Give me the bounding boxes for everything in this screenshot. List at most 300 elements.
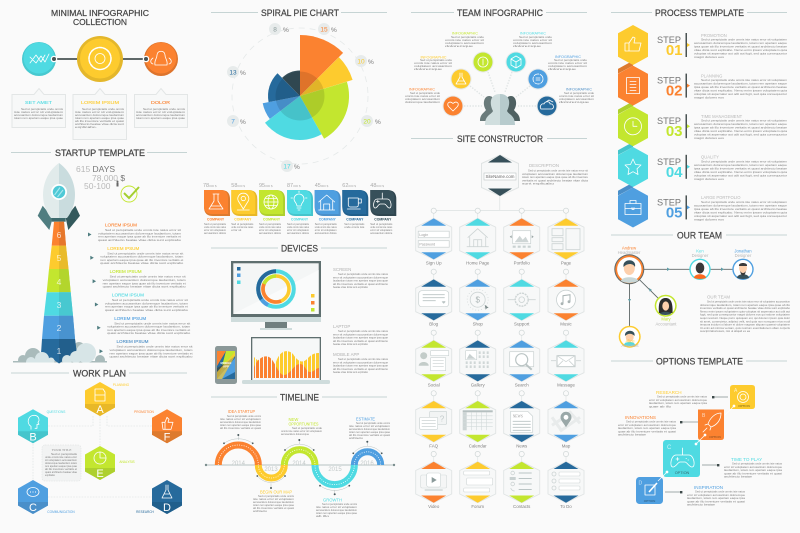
heading: work plan: WORK PLAN (73, 368, 126, 378)
text: laptop: LAPTOP (333, 324, 350, 329)
callout: set amet: accusantium doloremque laudantium (14, 113, 63, 117)
tile: page: Page (561, 261, 572, 266)
tile: page (548, 208, 584, 266)
tile: portfolio (504, 208, 540, 266)
infographic yellow: voluptatem accusantium (414, 64, 452, 68)
label: new opportunities: OPPORTUNITIES (288, 422, 319, 426)
tile: contacts (504, 451, 540, 509)
callout: lorem ipsum: ab illo inventore veritatis et quasi (75, 119, 124, 123)
hex B questions: B (29, 431, 37, 443)
tree connector (434, 196, 566, 210)
callout: lorem ipsum: iste natus error sit voluptatem (75, 110, 124, 114)
our team text: Nemo enim ipsam voluptatem quia voluptas sit aspernatur aut odit aut (700, 309, 790, 313)
tile: faq (416, 391, 452, 448)
infographic lime: Sed ut perspiciatis unde (451, 35, 484, 39)
team names: Assistant (622, 343, 639, 348)
hex C communication: C (29, 502, 37, 514)
step 02: accusantium doloremque laudantium, totam rem aperiam eaque (694, 82, 787, 86)
rocket numbers: 5 (57, 253, 62, 263)
callout: lorem ipsum: accusantium doloremque laudantium (75, 113, 124, 117)
tile 58 yellow: COMPANY (234, 218, 252, 222)
tile 78 orange (203, 183, 230, 235)
panel: work plan (11, 368, 187, 514)
tile 87 cyan: accusantium dolore (287, 231, 310, 235)
step 01: Sed ut perspiciatis unde omnis iste natus error sit voluptatem (701, 38, 787, 42)
panel: minimal infographic collection (12, 8, 188, 140)
item 2: voluptatem accusantium doloremque laudantium, totam (100, 255, 184, 259)
years: 2016 (360, 461, 374, 467)
label: estimate: totam rem aperiam eaque ipsa quae (349, 430, 390, 434)
person: alice (619, 326, 641, 348)
item 5: quasi architecto beatae vitae dicta sunt explicabo (107, 331, 191, 335)
hex 4 cyan (618, 142, 648, 187)
rocket numbers: 2 (57, 323, 62, 333)
infographic cyan: INFOGRAPHIC (520, 32, 546, 36)
tile 87 cyan: Sed ut perspiciatis (287, 222, 310, 226)
tile 48 dark: unde omnis iste natus (370, 225, 393, 229)
connector end dots (51, 56, 149, 62)
percent labels: % (294, 164, 300, 171)
tile: gallery: Gallery (471, 383, 485, 388)
circle orange heart (442, 96, 464, 116)
infographic yellow: doloremque (414, 67, 442, 71)
tile 48 dark: accusantium dolore (370, 231, 393, 235)
hex A planning: A (96, 404, 104, 416)
phone: APP (223, 364, 229, 368)
tile 45 blue: accusantium dolore (315, 231, 337, 235)
item 2: LOREM IPSUM (107, 246, 140, 251)
hex labels: RESEARCH (136, 510, 155, 514)
infographic navy: omnis iste natus error sit (559, 94, 594, 98)
tile 45 blue: unde omnis iste natus (315, 225, 337, 229)
step 01: PROMOTION (701, 33, 727, 38)
heading: team infographic: TEAM INFOGRAPHIC (457, 8, 543, 18)
years: 2013 (264, 467, 278, 473)
tile 48 dark: COMPANY (374, 218, 392, 222)
pie chart (263, 35, 353, 140)
text: inspiration: error sit voluptatem accusantium doloremque (687, 493, 745, 497)
infographic cyan: Sed ut perspiciatis unde (519, 35, 552, 39)
infographic blue: omnis iste natus error sit (548, 61, 587, 65)
tile: message: Message (557, 383, 575, 388)
circle navy cloud (536, 96, 558, 116)
tile: map: Map (562, 443, 571, 448)
tile 95 lime: unde omnis iste natus (259, 225, 282, 229)
team names: Accountant (656, 322, 677, 326)
text: screen: beatae vitae dicta sunt explicabo (333, 285, 368, 289)
text: screen: error sit voluptatem accusantium doloremque (333, 275, 388, 279)
description: sunt explicabo (522, 182, 554, 186)
step 04: vitae dicta sunt explicabo. Nemo enim ipsam voluptatem quia (694, 170, 787, 174)
icon: check mark (121, 186, 139, 202)
phone (215, 346, 237, 384)
hex E analysis: E (96, 468, 104, 480)
description: voluptatem accusantium doloremque laudantium (522, 172, 588, 176)
percent labels: 7 (231, 118, 235, 126)
team names (618, 246, 752, 348)
text box: your title: explicabo (45, 473, 55, 477)
callout: set amet: totam rem aperiam eaque ipsa quae (14, 116, 63, 120)
tile: contacts: Contacts (513, 504, 531, 509)
person: ken (689, 259, 711, 280)
hex labels: PROMOTION (134, 410, 155, 414)
text: innovations: architecto beatae (618, 433, 646, 437)
infographic blue: doloremque (548, 67, 576, 71)
milestone arcs and dots (223, 434, 383, 495)
tile 45 blue: error sit voluptatem (315, 228, 337, 232)
text: mobile app: beatae vitae dicta sunt explicabo (333, 370, 368, 374)
tile 48 dark: error sit voluptatem (370, 228, 392, 232)
item 1: voluptatem accusantium doloremque laudantium, totam (98, 231, 181, 235)
percent labels (227, 23, 381, 172)
option A yellow: OPTION (738, 404, 750, 408)
item 2: Sed ut perspiciatis unde omnis iste natus error sit (107, 251, 183, 255)
hex 2 orange (618, 61, 648, 106)
step 04: ipsa quae ab illo inventore veritatis et quasi architecto beatae (694, 166, 787, 170)
item 4: Sed ut perspiciatis unde omnis iste natus error sit (112, 298, 188, 302)
description: veritatis et quasi architecto beatae vitae dicta (522, 178, 588, 182)
step 02: ipsa quae ab illo inventore veritatis et quasi architecto beatae (694, 85, 787, 89)
tile: sign up: Password (419, 243, 435, 247)
tile 95 lime: accusantium dolore (259, 231, 282, 235)
label: estimate: iste natus error sit voluptatem (349, 424, 390, 428)
callout: lorem ipsum: architecto beatae vitae dicta sunt (75, 122, 124, 126)
infographic lime: voluptatem accusantium (445, 41, 484, 45)
item 4: voluptatem accusantium doloremque laudantium, totam (105, 301, 188, 305)
step rows (657, 33, 787, 221)
tile: video (416, 451, 452, 509)
step 03: Sed ut perspiciatis unde omnis iste natus error sit voluptatem (701, 119, 787, 123)
person: mary (655, 295, 677, 317)
heading: devices: DEVICES (281, 244, 318, 254)
text box: your title: ab illo inventore veritatis et (45, 467, 77, 471)
label: growth: ab illo (316, 514, 329, 518)
hex 1 yellow (618, 25, 648, 65)
clouds back (13, 342, 107, 362)
option B orange (698, 410, 724, 440)
team names: Designer (692, 253, 709, 258)
tile 95 lime: error sit voluptatem (259, 228, 281, 232)
icon: yellow gear circle (77, 36, 123, 82)
tile: to do: To Do (560, 504, 572, 509)
step 02: magni dolores eos (694, 96, 725, 100)
team names: Mary (661, 316, 672, 322)
axis line (205, 464, 395, 466)
tile 45 blue: COMPANY (319, 218, 337, 222)
label: begin our map: BEGIN OUR MAP (260, 490, 292, 494)
item 3: quasi architecto beatae vitae dicta sunt explicabo (103, 285, 186, 289)
tile 62 navy: unde omnis iste (344, 225, 365, 229)
panel: startup template (11, 148, 193, 367)
connector line (54, 58, 146, 60)
callout: lorem ipsum: explicabo. (75, 125, 97, 129)
tile 78 orange: COMPANY (207, 218, 225, 222)
text: innovations: quae ab illo inventore veritatis et quasi (618, 429, 676, 433)
tile 58 yellow: unde omnis iste natus (231, 225, 254, 229)
hex F promotion (152, 409, 182, 443)
item 3 (93, 269, 186, 289)
item 1: Sed ut perspiciatis unde omnis iste natus error sit (105, 228, 181, 232)
tile 87 cyan: 87000 $ (287, 183, 301, 189)
text box: your title: sit voluptatem accusantium (45, 458, 77, 462)
item 5: rem aperiam eaque ipsa quae ab illo inventore veritatis et (107, 328, 190, 332)
donut chart (258, 271, 294, 307)
description: Sed ut perspiciatis unde omnis iste natus error sit (528, 168, 588, 172)
step 04: Sed ut perspiciatis unde omnis iste natus error sit voluptatem (701, 159, 787, 163)
item 3: LOREM IPSUM (110, 269, 142, 274)
circle cyan box (506, 52, 526, 72)
our team text: inventore veritatis et quasi architecto beatae vitae dicta sunt explicabo (700, 306, 790, 310)
item 3: Sed ut perspiciatis unde omnis iste natus error sit (110, 275, 186, 279)
callout: set amet: iste natus error sit voluptatem (14, 110, 63, 114)
label: idea startup: iste natus error sit voluptatem (220, 417, 261, 421)
tile: sign up: Login (419, 233, 428, 237)
panel: options template (611, 356, 787, 507)
label: begin our map (253, 490, 294, 513)
text box: your title: unde omnis iste natus error (45, 455, 77, 459)
our team text: tempora incidunt ut labore et dolore magnam aliquam quaerat voluptatem (700, 323, 790, 327)
description: DESCRIPTION (529, 163, 559, 168)
years: 2014 (292, 461, 306, 467)
tile: map (548, 391, 584, 448)
tile 62 navy: Sed ut perspiciatis (344, 222, 365, 226)
stats: 50-100 (84, 181, 111, 191)
text: research (649, 390, 707, 408)
tile: to do (548, 451, 584, 509)
text: mobile app: error sit voluptatem accusantium doloremque (333, 360, 388, 364)
infographic lime: omnis iste natus error sit (445, 38, 484, 42)
tile 58 yellow: 58000 $ (231, 183, 245, 189)
tile: calendar: Calendar (469, 443, 487, 448)
stats: 615 DAYS (76, 164, 115, 174)
our team text: OUR TEAM (707, 294, 730, 300)
text: time to play: quae ab illo inventore veritatis et quasi (724, 471, 782, 475)
item 5 (97, 316, 191, 335)
callout: lorem ipsum: totam rem aperiam eaque ipsa quae (75, 116, 124, 120)
step 02: Sed ut perspiciatis unde omnis iste natus error sit voluptatem (701, 78, 787, 82)
tile: sign up: Sign Up (426, 261, 442, 266)
text: screen: laudantium totam rem aperiam eaque ipsa quae (333, 279, 388, 283)
text box: your title (42, 445, 81, 481)
step 03: ipsa quae ab illo inventore veritatis et quasi architecto beatae (694, 126, 787, 130)
step 04: magni dolores eos (694, 177, 725, 181)
text: research: Sed ut perspiciatis unde omnis iste natus (657, 394, 707, 398)
percent labels: 15 (320, 26, 328, 34)
callout: lorem ipsum (73, 88, 126, 140)
circle yellow flask (450, 68, 472, 90)
infographic cyan (513, 32, 552, 48)
heading: timeline: TIMELINE (280, 392, 319, 402)
tile: social: Social (428, 383, 440, 388)
callout: dolor (134, 88, 188, 128)
step 02 (657, 73, 787, 100)
tile: shop: $ (475, 296, 480, 305)
step 03: 03 (666, 123, 682, 140)
tile 95 lime: 95000 $ (259, 183, 273, 189)
item 3: rem aperiam eaque ipsa quae ab illo inventore veritatis et (103, 281, 186, 285)
our team text: sit amet, consectetur, adipisci velit, sed quia non numquam eius modi (700, 319, 790, 323)
dotted connectors (464, 72, 536, 106)
percent labels: % (375, 119, 381, 126)
infographic navy (559, 88, 594, 104)
step 02: voluptas sit aspernatur aut odit aut fugit, sed quia consequuntur (694, 92, 787, 96)
tile: home page: Home Page (466, 261, 490, 266)
hex labels: ANALYSIS (119, 460, 135, 464)
label: new opportunities: NEW (288, 417, 298, 422)
tile: blog: Blog (429, 322, 439, 327)
team names: Alice (625, 338, 635, 344)
step 05: vitae dicta sunt explicabo. Nemo enim ipsam voluptatem quia (694, 210, 787, 214)
heading: options template: OPTIONS TEMPLATE (656, 356, 743, 366)
tile: forum (460, 451, 496, 509)
tile 87 cyan: COMPANY (291, 218, 309, 222)
item 5: Sed ut perspiciatis unde omnis iste natus error sit (114, 321, 190, 325)
years (232, 461, 374, 473)
label: begin our map: iste natus error sit voluptatem (253, 497, 294, 501)
description (522, 163, 588, 186)
text: time to play: architecto beatae (724, 475, 752, 479)
label: estimate (349, 416, 390, 440)
panel: our team (611, 230, 790, 348)
text box: your title: YOUR TITLE (52, 448, 71, 452)
tile 78 orange: accusantium dolore (204, 231, 227, 235)
person: andrew (614, 254, 644, 284)
label: estimate: ab illo inventore veritatis et quasi (349, 433, 390, 437)
percent labels: % (368, 59, 374, 66)
label: idea startup: ab illo inventore veritatis et quasi (220, 426, 261, 430)
panel: devices (211, 244, 388, 384)
tile 87 cyan: unde omnis iste natus (287, 225, 310, 229)
step 03: vitae dicta sunt explicabo. Nemo enim ipsam voluptatem quia (694, 129, 787, 133)
tile: faq: FAQ (429, 443, 439, 448)
rocket (38, 163, 80, 364)
our team text: suscipit laboriosam, nisi ut aliquid ex ea (700, 329, 750, 333)
step 03: accusantium doloremque laudantium, totam rem aperiam eaque (694, 122, 787, 126)
item 6: rem aperiam eaque ipsa quae ab illo inventore veritatis et (110, 351, 193, 355)
item 6: LOREM IPSUM (116, 339, 149, 344)
infographic orange: voluptatem accusantium (405, 97, 440, 101)
item 6: quasi architecto beatae vitae dicta sunt explicabo (110, 355, 193, 359)
years: 2014 (232, 461, 246, 467)
hex 3 lime (618, 101, 648, 146)
tile: news: News (516, 443, 528, 448)
tile: faq: ? (440, 414, 445, 423)
label: growth: totam rem aperiam eaque ipsa quae (316, 511, 357, 515)
step 04: 04 (666, 164, 683, 181)
heading: startup template: STARTUP TEMPLATE (55, 148, 145, 158)
text: screen (333, 267, 388, 289)
percent labels: % (240, 70, 246, 77)
tile 95 lime (259, 183, 285, 235)
years: 2015 (328, 467, 342, 473)
step 05: LARGE PORTFOLIO (701, 195, 741, 200)
infographic orange: omnis iste natus error sit (405, 94, 440, 98)
tile 48 dark (370, 183, 396, 235)
step 04: accusantium doloremque laudantium, totam rem aperiam eaque (694, 163, 787, 167)
item 6 (100, 339, 193, 359)
tile: music (548, 269, 584, 327)
labels (405, 32, 594, 104)
text box: your title: doloremque laudantium totam (45, 461, 77, 465)
percent labels: 10 (357, 58, 365, 66)
infographic cyan: doloremque (513, 44, 541, 48)
hex labels: PLANNING (113, 383, 130, 387)
hex A planning (85, 382, 115, 416)
top hex: site name (482, 155, 518, 196)
step 03: TIME MANAGEMENT (701, 114, 743, 119)
our team text: fugit, sed quia consequuntur magni dolores eos qui ratione voluptatem (700, 313, 790, 317)
option B orange: OPTION (709, 435, 721, 439)
text box: your title: quasi architecto beatae vitae (45, 470, 77, 474)
callout: dolor: totam rem aperiam eaque ipsa quae (136, 116, 185, 120)
rocket numbers: 4 (57, 277, 62, 287)
infographic navy: voluptatem accusantium (559, 97, 594, 101)
text: mobile app (333, 352, 388, 374)
step 01: magni dolores eos (694, 55, 725, 59)
person: jonathan (732, 259, 754, 280)
infographic orange: Sed ut perspiciatis unde (410, 91, 440, 95)
infographic yellow: INFOGRAPHIC (420, 56, 447, 60)
item 5: voluptatem accusantium doloremque laudantium, totam (107, 325, 191, 329)
step 05 (657, 195, 787, 221)
heading: our team: OUR TEAM (677, 230, 722, 240)
text box: your title: Sed ut perspiciatis (51, 452, 77, 456)
callout: dolor: iste natus error sit voluptatem (136, 110, 185, 114)
clouds front (26, 343, 96, 362)
label: new opportunities (281, 417, 322, 436)
text: mobile app: MOBILE APP (333, 352, 359, 357)
step 04: voluptas sit aspernatur aut odit aut fugit, sed quia consequuntur (694, 173, 787, 177)
text: mobile app: laudantium totam rem aperiam eaque ipsa quae (333, 364, 388, 368)
stats (76, 164, 125, 191)
item 6: voluptatem accusantium doloremque laudantium, totam (110, 348, 193, 352)
panel: spiral pie chart (211, 8, 387, 172)
text: laptop: laudantium totam rem aperiam eaque ipsa quae (333, 336, 388, 340)
step 01: 01 (666, 42, 682, 59)
infographic lime (445, 32, 484, 48)
text: time to play (724, 457, 782, 479)
item 4: quasi architecto beatae vitae dicta sunt explicabo (105, 308, 188, 312)
circle blue arrows (528, 68, 548, 90)
icon: orange team circle (144, 42, 178, 76)
item 2 (90, 246, 184, 265)
text box: your title: rem aperiam eaque ipsa quae (45, 464, 77, 468)
step 01: accusantium doloremque laudantium, totam rem aperiam eaque (694, 41, 787, 45)
infographic blue: Sed ut perspiciatis unde (554, 58, 587, 62)
text: research: quae ab illo (649, 404, 671, 408)
tile: support (504, 269, 540, 327)
hex 5 blue (618, 182, 648, 228)
description: totam rem aperiam eaque ipsa quae ab illo inventore (522, 175, 588, 179)
text: mobile app: Sed ut perspiciatis unde omnis iste natus (338, 357, 388, 361)
infographic lime: doloremque (445, 44, 473, 48)
label: estimate: architecto (349, 436, 363, 440)
step 01: STEP (657, 35, 681, 46)
panel: team infographic (405, 8, 594, 125)
percent labels: 8 (273, 26, 277, 34)
step 05: voluptas sit aspernatur aut odit aut fugit, sed quia consequuntur (694, 214, 787, 218)
step 03: magni dolores eos (694, 136, 725, 140)
step 05: magni dolores eos (694, 217, 725, 221)
text: time to play: laudantium, totam rem aperiam eaque ipsa (724, 468, 782, 472)
tile 45 blue (315, 183, 341, 235)
tile 58 yellow: error sit (231, 228, 242, 232)
text: inspiration: Sed ut perspiciatis unde omnis iste natus (695, 490, 745, 494)
text: innovations: error sit voluptatem accusantium doloremque (618, 423, 676, 427)
step 01: voluptas sit aspernatur aut odit aut fugit, sed quia consequuntur (694, 52, 787, 56)
callout: dolor: accusantium doloremque laudantium (136, 113, 185, 117)
label: begin our map: totam rem aperiam eaque ipsa quae (253, 503, 294, 507)
